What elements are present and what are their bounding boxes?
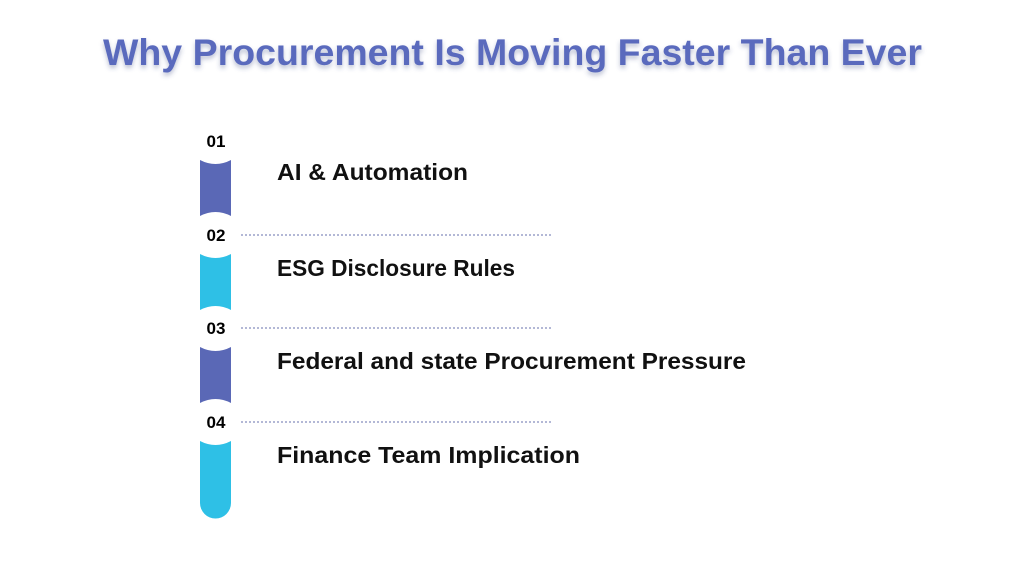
step 3: 03 <box>207 319 225 338</box>
title: Why Procurement Is Moving Faster Than Ever <box>103 32 922 73</box>
step 3: Federal and state Procurement Pressure <box>277 348 746 374</box>
step 4: 04 <box>207 413 226 432</box>
step 3 <box>200 319 746 403</box>
step 1 <box>200 132 468 216</box>
step 2 <box>200 226 553 310</box>
step 4: Finance Team Implication <box>277 442 580 468</box>
step 2: 02 <box>207 226 225 245</box>
step 1: AI & Automation <box>277 159 468 185</box>
step 1: 01 <box>207 132 225 151</box>
step 2: ESG Disclosure Rules <box>277 255 515 281</box>
step 4 <box>200 413 580 518</box>
